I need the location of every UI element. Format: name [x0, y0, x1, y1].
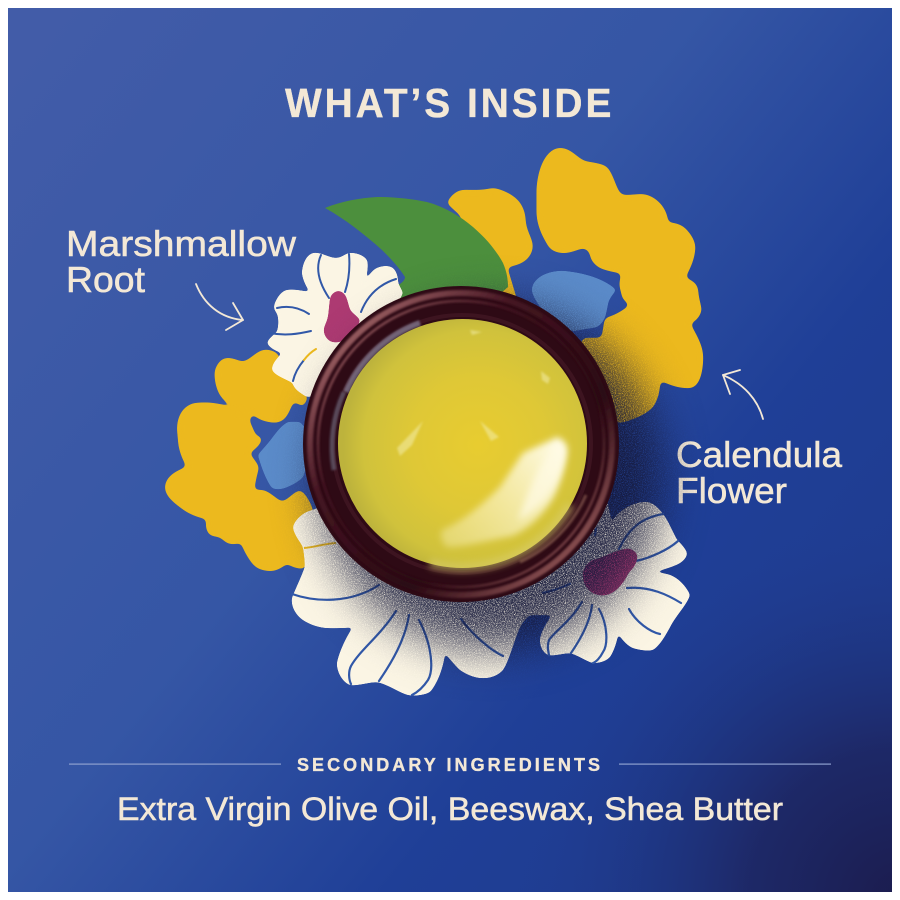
icon: small calendula flower behind leaf [447, 188, 533, 310]
divider line left [69, 764, 281, 765]
icon: magenta flower centre [324, 291, 360, 342]
jar [303, 286, 619, 602]
arrow: to marshmallow root [196, 284, 243, 330]
label: marshmallow root: Marshmallow [66, 223, 297, 264]
balm surface [338, 319, 587, 568]
yellow line over flower [304, 543, 336, 548]
icon: large white flower bottom [292, 450, 690, 695]
jar shadow [318, 306, 662, 650]
icon: left light-blue petal [258, 422, 315, 489]
balm small glints [397, 330, 550, 456]
icon: marshmallow flower top-left [267, 253, 403, 397]
label: marshmallow root [66, 223, 297, 300]
jar rim [303, 286, 619, 602]
icon: plum flower centre [583, 549, 637, 595]
label: marshmallow root: Root [66, 259, 145, 300]
label: calendula flower: Flower [676, 470, 787, 511]
botanical illustration [165, 148, 703, 695]
balm lower edge [430, 505, 570, 567]
yellow vein on marshmallow flower [304, 349, 316, 360]
title: WHAT’S INSIDE [285, 81, 611, 126]
divider line right [619, 764, 831, 765]
subheading: secondary ingredients: SECONDARY INGREDIENTS [297, 755, 600, 775]
icon: left calendula flower [165, 350, 313, 571]
label: calendula flower [676, 434, 843, 511]
arrow: to calendula flower [723, 370, 763, 419]
label: calendula flower: Calendula [676, 434, 843, 475]
icon: right light-blue petal [532, 271, 616, 331]
ingredient list: Extra Virgin Olive Oil, Beeswax, Shea Butter [117, 791, 783, 827]
icon: green leaf [325, 197, 508, 320]
balm highlight [441, 437, 567, 547]
icon: large calendula flower right [537, 148, 703, 423]
